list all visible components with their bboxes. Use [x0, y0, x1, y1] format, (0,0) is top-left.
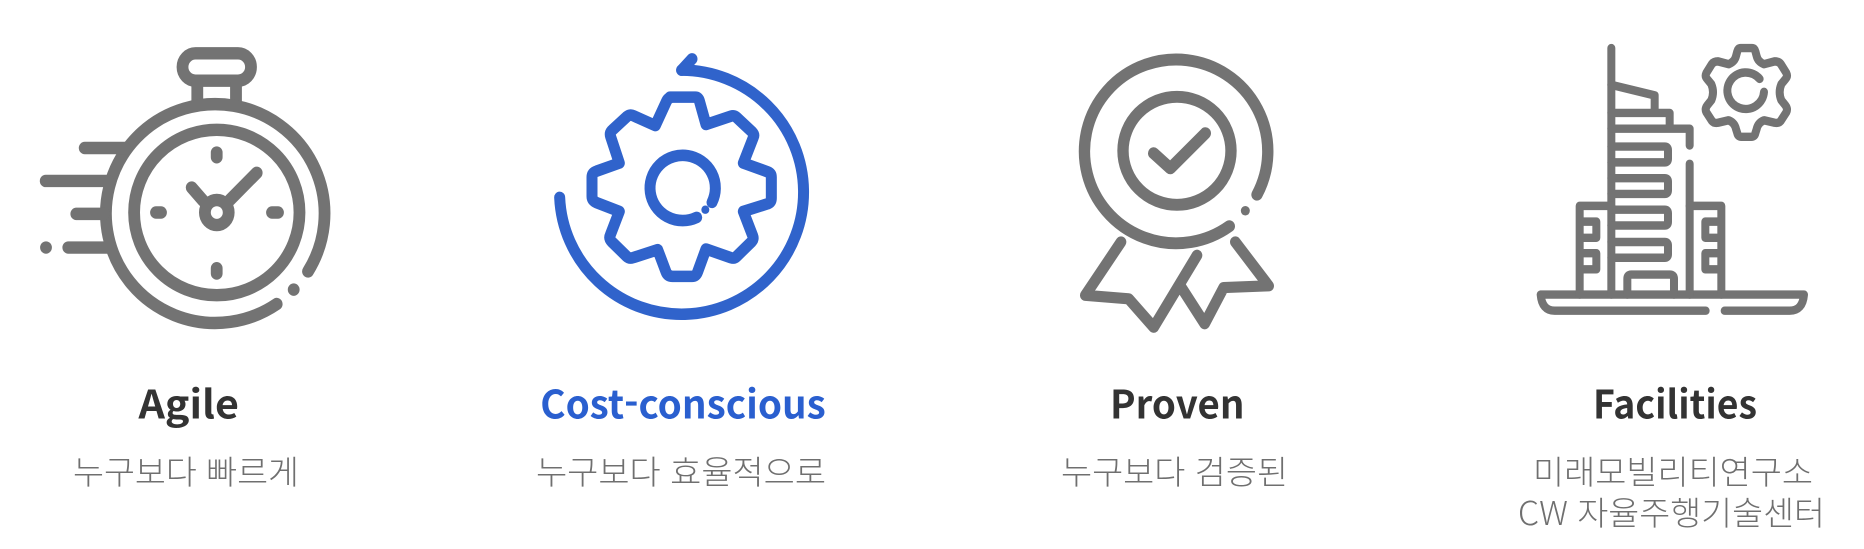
- text: agile subtitle: 누구보다 빠르게: [73, 446, 299, 494]
- text: proven subtitle: 누구보다 검증된: [1061, 446, 1288, 494]
- panel: facilities: [1518, 48, 1825, 535]
- heading: Facilities: Facilities: [1593, 375, 1757, 431]
- icon: award ribbon with check: [1084, 59, 1269, 327]
- heading: Agile: Agile: [137, 375, 239, 431]
- heading: Cost-conscious: Cost-conscious: [540, 375, 826, 431]
- heading: Proven: Proven: [1110, 375, 1244, 431]
- icon: building with gear: [1541, 48, 1804, 311]
- panel: agile: [40, 53, 325, 494]
- icon: stopwatch: [40, 53, 325, 323]
- text: facilities subtitle line 1: 미래모빌리티연구소: [1533, 446, 1813, 494]
- text: facilities subtitle line 2: CW 자율주행기술센터: [1518, 487, 1825, 535]
- panel: proven: [1061, 59, 1288, 494]
- panel: cost-conscious: [536, 59, 826, 494]
- icon: gear with circular arrow: [560, 59, 804, 314]
- text: cost-conscious subtitle: 누구보다 효율적으로: [536, 446, 826, 494]
